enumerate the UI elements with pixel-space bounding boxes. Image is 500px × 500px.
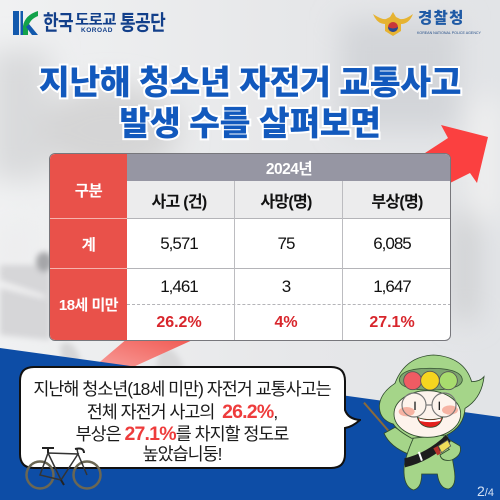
row label: under 18: 18세 미만 [59, 297, 118, 314]
police english name: KOREAN NATIONAL POLICE AGENCY [417, 31, 481, 35]
logo: KOROAD: 통공단 [120, 11, 165, 35]
pointer stick [364, 403, 388, 431]
callout text: 지난해 청소년(18세 미만) 자전거 교통사고는 [33, 379, 331, 399]
row: under 18 values: 1,461 [160, 276, 198, 296]
row: under 18 percentages [156, 314, 415, 330]
KOROAD wordmark: 한국 [43, 11, 73, 35]
title: 발생 수를 살펴보면 [119, 106, 381, 143]
traffic light: yellow [421, 371, 439, 390]
logo: KOROAD: 도로교 [75, 12, 116, 28]
cheeks [399, 407, 415, 416]
callout text: 부상은 27.1%를 차지할 정도로 [76, 423, 288, 445]
hat band edge [399, 368, 462, 390]
speech bubble [19, 366, 361, 469]
row label: category [50, 154, 127, 219]
title [36, 64, 462, 143]
traffic light: green [439, 372, 457, 390]
row label: total: 계 [82, 236, 95, 254]
row: total values: 75 [278, 234, 294, 252]
row: total values [127, 219, 451, 269]
logo: KOROAD: KOROAD [81, 27, 113, 34]
icon: police emblem [373, 12, 413, 36]
row: under 18 values: 3 [282, 276, 290, 296]
character mascot [363, 354, 485, 490]
row: under 18 values: 1,647 [373, 276, 411, 296]
row: under 18 percentages: 4% [274, 314, 298, 330]
red label column [50, 154, 127, 340]
face [394, 391, 461, 437]
body and legs [404, 435, 455, 490]
title: 지난해 청소년 자전거 교통사고 [39, 65, 461, 102]
year header: 2024년 [266, 160, 312, 178]
column headers [127, 181, 451, 219]
row label: category: 구분 [75, 183, 102, 200]
row: under 18 values [127, 269, 451, 305]
row: under 18 percentages: 26.2% [156, 314, 202, 330]
row: total values: 6,085 [373, 234, 411, 252]
mouth [417, 417, 443, 427]
row: under 18 percentages: 27.1% [369, 314, 415, 330]
traffic light: red [404, 372, 422, 390]
year header [127, 154, 451, 181]
panel: statistics table [49, 153, 451, 341]
icon: bicycle [25, 447, 102, 490]
column headers: 사고 (건) [151, 194, 207, 210]
callout text: 전체 자전거 사고의 26.2%, [87, 401, 277, 423]
column headers: 사망(명) [260, 194, 312, 210]
police wordmark: 경찰청 [418, 10, 465, 27]
callout text [33, 379, 331, 464]
left arm [384, 427, 414, 454]
logo: KOROAD [13, 11, 166, 35]
icon: KOROAD K mark [13, 11, 38, 35]
row: total values: 5,571 [160, 234, 198, 252]
page number: 2/4 [477, 483, 494, 499]
right arm [440, 437, 461, 460]
logo: national police [373, 10, 481, 36]
row label: total [50, 219, 127, 269]
column headers: 부상(명) [371, 194, 423, 210]
sash [404, 435, 451, 467]
callout text: 높았습니둥! [143, 444, 221, 464]
glasses [402, 393, 456, 417]
hood [379, 355, 484, 438]
